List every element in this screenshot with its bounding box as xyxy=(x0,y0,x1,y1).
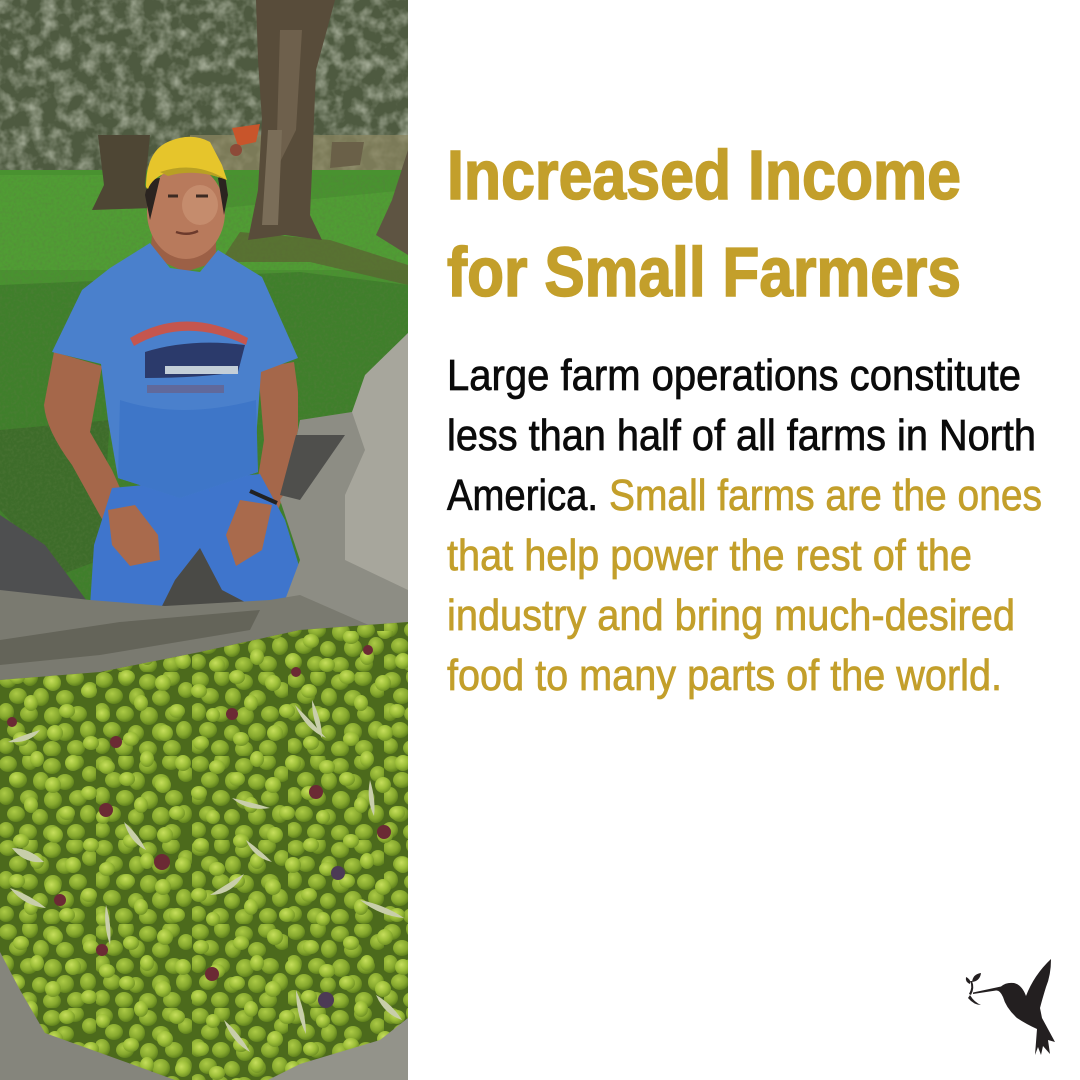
title: Increased Income xyxy=(447,136,961,214)
farmer xyxy=(44,137,307,614)
olive pile xyxy=(0,620,415,1080)
body text: industry and bring much-desired xyxy=(447,591,1015,640)
blue t-shirt xyxy=(52,243,298,498)
body text: that help power the rest of the xyxy=(447,531,972,580)
photo: farmer with olive harvest xyxy=(0,0,415,1080)
olive grove background xyxy=(0,0,408,600)
silver leaves xyxy=(8,700,404,1052)
red tractor xyxy=(230,124,260,156)
hands xyxy=(108,505,160,566)
face xyxy=(147,165,225,259)
body text: food to many parts of the world. xyxy=(447,651,1002,700)
tree trunks xyxy=(92,0,408,255)
title: for Small Farmers xyxy=(447,233,961,311)
grey tarp xyxy=(0,333,408,695)
title xyxy=(447,136,961,311)
trousers xyxy=(90,474,307,614)
yellow cap xyxy=(146,137,227,189)
body text: Large farm operations constitute xyxy=(447,351,1021,400)
icon: hummingbird logo xyxy=(966,959,1055,1055)
neck xyxy=(150,235,216,272)
dark purple olives xyxy=(7,645,391,1008)
shirt print xyxy=(130,322,248,393)
tarp behind knees xyxy=(162,548,244,606)
right arm xyxy=(258,362,298,508)
body text: America. xyxy=(447,471,598,520)
body text xyxy=(447,351,1042,700)
sacking at the pile's bottom corners xyxy=(0,952,408,1080)
left arm xyxy=(44,352,120,520)
